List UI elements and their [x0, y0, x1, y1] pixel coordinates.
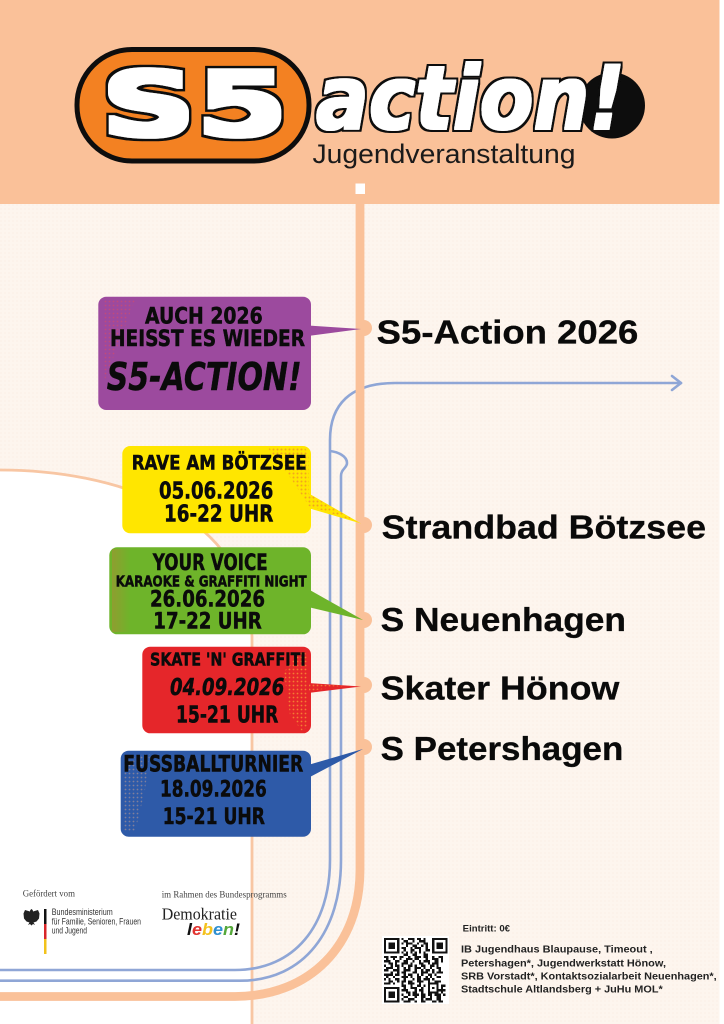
- funding: Demokratie leben: [162, 891, 287, 939]
- white stop square: [356, 184, 365, 194]
- location: Strandbad Bötzsee: Strandbad Bötzsee: [382, 508, 706, 545]
- entry price: Eintritt: 0€: [463, 924, 510, 934]
- bubble: Rave am Bötzsee: 16-22 UHR: [164, 502, 274, 528]
- location: Skater Hönow: Skater Hönow: [381, 669, 620, 706]
- bubble: Rave am Bötzsee: RAVE AM BÖTZSEE: [132, 450, 307, 474]
- bubble: S5-Action 2026: AUCH 2026: [145, 304, 263, 329]
- bubble: S5-Action 2026: S5-ACTION!: [107, 355, 302, 399]
- top band: [0, 0, 720, 204]
- location: S5-Action 2026: S5-Action 2026: [377, 313, 638, 350]
- bubble: Skate 'n' Graffiti: SKATE 'N' GRAFFITI: [150, 650, 306, 671]
- icon: federal eagle: [24, 909, 40, 926]
- background: white area under the arc: [0, 470, 252, 1024]
- logo: orange oval: [77, 50, 309, 161]
- funding: Demokratie leben: im Rahmen des Bundesprogramms: [162, 891, 287, 901]
- organisers text: SRB Vorstadt*, Kontaktsozialarbeit Neuenhagen*,: [461, 970, 717, 982]
- bubble: Skate 'n' Graffiti: 15-21 UHR: [176, 702, 279, 728]
- funding: ministry: und Jugend: [52, 925, 87, 936]
- funding: ministry: für Familie, Senioren, Frauen: [52, 916, 141, 927]
- bubble: Your Voice: KARAOKE & GRAFFITI NIGHT: [116, 573, 307, 591]
- organisers text: [461, 944, 717, 996]
- QR code: [382, 936, 449, 1004]
- icon: flag bar: [44, 909, 46, 954]
- bubble: Rave am Bötzsee: 05.06.2026: [159, 478, 273, 504]
- location: S Petershagen: S Petershagen: [381, 730, 623, 767]
- background: cream area: [0, 204, 720, 1024]
- funding: ministry: Bundesministerium: [52, 907, 113, 918]
- bubble: Fussballturnier: FUSSBALLTURNIER: [123, 753, 303, 778]
- bubble: Your Voice: YOUR VOICE: [152, 551, 268, 576]
- blue route with arrow: [0, 376, 681, 970]
- logo: subtitle: Jugendveranstaltung: [312, 139, 576, 169]
- stop markers: [356, 320, 372, 755]
- organisers text: Petershagen*, Jugendwerkstatt Hönow,: [461, 958, 666, 970]
- bubble: Skate 'n' Graffiti: [142, 647, 361, 733]
- funding: ministry: Gefördert vom: [23, 889, 76, 900]
- bubble: Skate 'n' Graffiti: 04.09.2026: [170, 675, 284, 701]
- thin orange route: [0, 470, 252, 1024]
- logo: action!: action!: [316, 47, 625, 150]
- logo: S5: S5: [101, 53, 288, 156]
- bubble: S5-Action 2026: [98, 297, 361, 410]
- bubble: Rave am Bötzsee: [122, 446, 361, 533]
- second blue route: [0, 451, 347, 981]
- logo: black circle: [579, 72, 645, 138]
- funding: Demokratie leben: Demokratie: [162, 904, 237, 923]
- bubble: Your Voice: 17-22 UHR: [153, 609, 262, 634]
- funding: Demokratie leben: leben!: [187, 920, 240, 939]
- location: S Neuenhagen: S Neuenhagen: [381, 601, 626, 638]
- bubble: Fussballturnier: [121, 749, 363, 837]
- bubble: Your Voice: [109, 547, 363, 634]
- bubble: Fussballturnier: 15-21 UHR: [163, 805, 265, 830]
- bubble: S5-Action 2026: HEISST ES WIEDER: [110, 327, 305, 352]
- logo: [77, 47, 645, 169]
- funding: ministry: [23, 889, 141, 954]
- main orange route: [0, 204, 360, 996]
- organisers text: IB Jugendhaus Blaupause, Timeout ,: [461, 944, 653, 956]
- bubble: Your Voice: 26.06.2026: [150, 588, 265, 613]
- bubble: Fussballturnier: 18.09.2026: [160, 778, 267, 803]
- organisers text: Stadtschule Altlandsberg + JuHu MOL*: [461, 984, 664, 996]
